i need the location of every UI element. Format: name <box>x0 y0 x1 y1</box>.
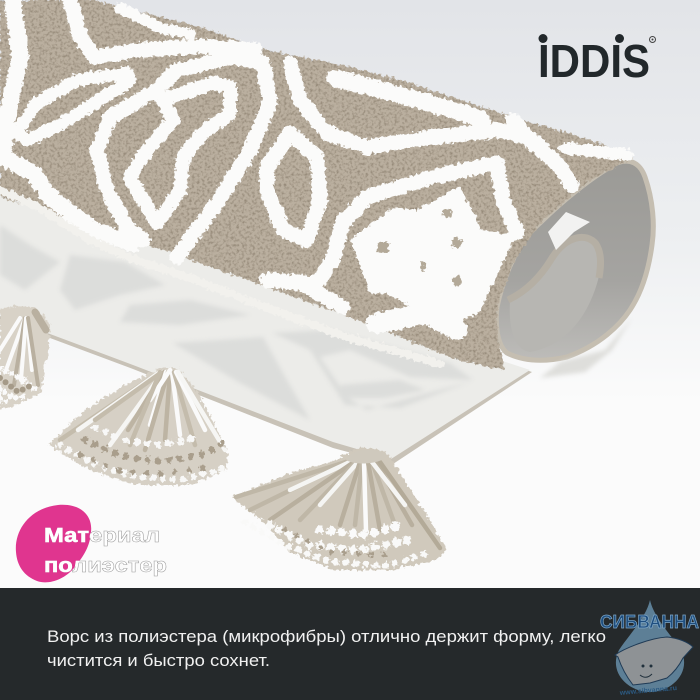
water drop <box>616 600 684 692</box>
tassel middle <box>48 368 228 485</box>
pink blob <box>16 505 91 582</box>
brand name: СИБВАННА <box>600 612 699 632</box>
bathtub <box>615 637 693 685</box>
tassel left <box>0 306 50 408</box>
caption text: Ворс из полиэстера (микрофибры) отлично держит форму, легко <box>47 628 606 646</box>
outlined label text: полиэстер <box>44 555 167 577</box>
label text over blob <box>45 528 91 572</box>
white flower motif <box>350 186 516 325</box>
tassel head <box>346 450 388 463</box>
site url: www.sibvanna.ru <box>619 685 677 697</box>
outlined label text: Материал <box>44 525 160 547</box>
label text over blob: полиэстер <box>44 555 167 577</box>
caption text: чистится и быстро сохнет. <box>47 652 270 670</box>
caption text <box>47 628 606 670</box>
white tufted pattern <box>0 0 627 364</box>
outlined label text <box>44 525 167 577</box>
face <box>640 664 652 677</box>
logo: IDDIS: IDDIS <box>538 35 650 87</box>
watermark: Sibvanna <box>600 600 699 697</box>
rolled rug end with grey backing <box>496 161 653 378</box>
underside woven pattern <box>0 225 473 420</box>
flat rug underside <box>0 195 532 464</box>
tassel right <box>232 448 447 570</box>
inner swirl fold <box>510 237 600 352</box>
dark caption bar <box>0 588 700 700</box>
pile texture <box>0 0 660 375</box>
registered mark <box>650 36 656 42</box>
material badge <box>16 505 167 582</box>
rolled rug pile <box>0 0 660 375</box>
label text over blob: Материал <box>44 525 160 547</box>
